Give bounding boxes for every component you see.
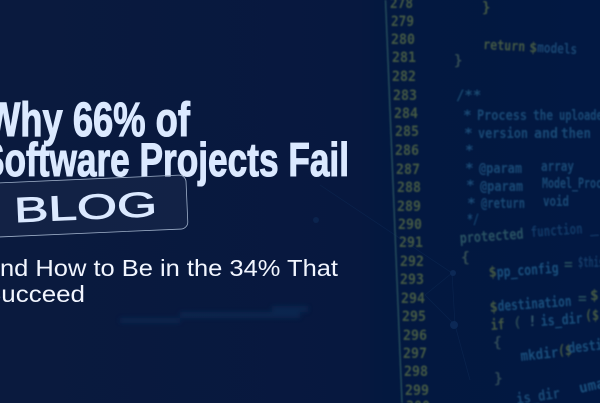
code: doc comment: */ bbox=[467, 212, 479, 228]
code: doc comment: @param bbox=[479, 161, 522, 177]
line numbers: 298 bbox=[404, 364, 428, 380]
title bbox=[0, 94, 349, 186]
line numbers: 279 bbox=[391, 14, 414, 30]
code: protected function: mkdir bbox=[520, 345, 559, 365]
line numbers: 283 bbox=[393, 88, 417, 104]
line numbers: 290 bbox=[398, 217, 422, 233]
code: doc comment: * bbox=[467, 196, 476, 212]
code: protected function bbox=[459, 220, 600, 403]
background network pattern bbox=[313, 185, 470, 380]
code: protected function: if bbox=[490, 317, 505, 334]
code: protected function: ($ bbox=[558, 343, 572, 359]
code: doc comment: * bbox=[464, 126, 473, 142]
code: return models: $ bbox=[529, 40, 538, 56]
code: protected function: $ bbox=[590, 288, 599, 304]
subtitle bbox=[0, 255, 339, 307]
line numbers: 286 bbox=[395, 143, 419, 159]
code: doc comment: version bbox=[478, 126, 528, 142]
code: doc comment: @return bbox=[481, 196, 525, 212]
line numbers: 287 bbox=[396, 162, 420, 178]
code: doc comment: array bbox=[541, 159, 574, 175]
code screen background bbox=[386, 0, 600, 403]
code: doc comment: then bbox=[561, 126, 591, 142]
line numbers: 288 bbox=[397, 180, 421, 196]
code: return models: } bbox=[454, 53, 462, 69]
code: return models: models bbox=[537, 40, 578, 58]
code: doc comment: * bbox=[465, 143, 474, 159]
line numbers: 293 bbox=[400, 272, 424, 288]
line numbers: 296 bbox=[403, 328, 427, 344]
code: protected function: function bbox=[530, 221, 583, 241]
line numbers: 285 bbox=[395, 124, 419, 140]
line numbers: 280 bbox=[391, 32, 415, 48]
code: protected function: { bbox=[493, 335, 502, 351]
line numbers: 299 bbox=[405, 383, 429, 399]
badge outline bbox=[0, 175, 188, 238]
code: protected function: $ bbox=[489, 299, 498, 316]
code: doc comment: the bbox=[533, 108, 553, 124]
code: protected function: pp_config bbox=[496, 261, 559, 281]
blurred background code on left bbox=[120, 306, 308, 323]
code: doc comment: @param bbox=[480, 179, 523, 195]
code: doc comment: * bbox=[466, 178, 475, 194]
code: doc comment: Process bbox=[477, 108, 527, 124]
code: protected function: $ bbox=[488, 264, 497, 281]
code: return models: /** bbox=[456, 88, 481, 104]
code: return models bbox=[454, 0, 578, 104]
code: protected function: = bbox=[578, 291, 587, 307]
code: return models: return bbox=[483, 37, 526, 55]
code: protected function: destination bbox=[497, 294, 572, 315]
code: doc comment: and bbox=[534, 126, 558, 142]
line numbers: 292 bbox=[400, 254, 424, 270]
code: protected function: ( bbox=[513, 315, 522, 331]
code: protected function: is_dir bbox=[540, 311, 583, 330]
code: doc comment: * bbox=[465, 161, 474, 177]
line numbers: 291 bbox=[399, 235, 423, 251]
line numbers: 295 bbox=[402, 309, 426, 325]
code: doc comment: void bbox=[543, 194, 569, 210]
code: protected function: _ bbox=[589, 220, 599, 237]
line numbers: 284 bbox=[394, 106, 418, 122]
line numbers: 294 bbox=[401, 291, 425, 307]
line numbers: 297 bbox=[403, 346, 427, 362]
code: protected function: ! bbox=[528, 314, 537, 330]
line numbers: 281 bbox=[392, 50, 416, 66]
badge label: BLOG bbox=[13, 185, 158, 230]
code: doc comment bbox=[463, 108, 600, 228]
code: doc comment: * bbox=[463, 108, 472, 124]
code: protected function: { bbox=[461, 250, 470, 266]
code: protected function: protected bbox=[459, 227, 524, 247]
gutter line bbox=[386, 0, 402, 403]
line numbers bbox=[390, 0, 430, 403]
line numbers: 282 bbox=[392, 69, 416, 85]
code: return models: } bbox=[482, 0, 490, 16]
line numbers: 289 bbox=[397, 199, 421, 215]
code: protected function: } bbox=[494, 371, 503, 387]
code: protected function: = bbox=[564, 257, 573, 273]
blog badge bbox=[0, 175, 188, 238]
